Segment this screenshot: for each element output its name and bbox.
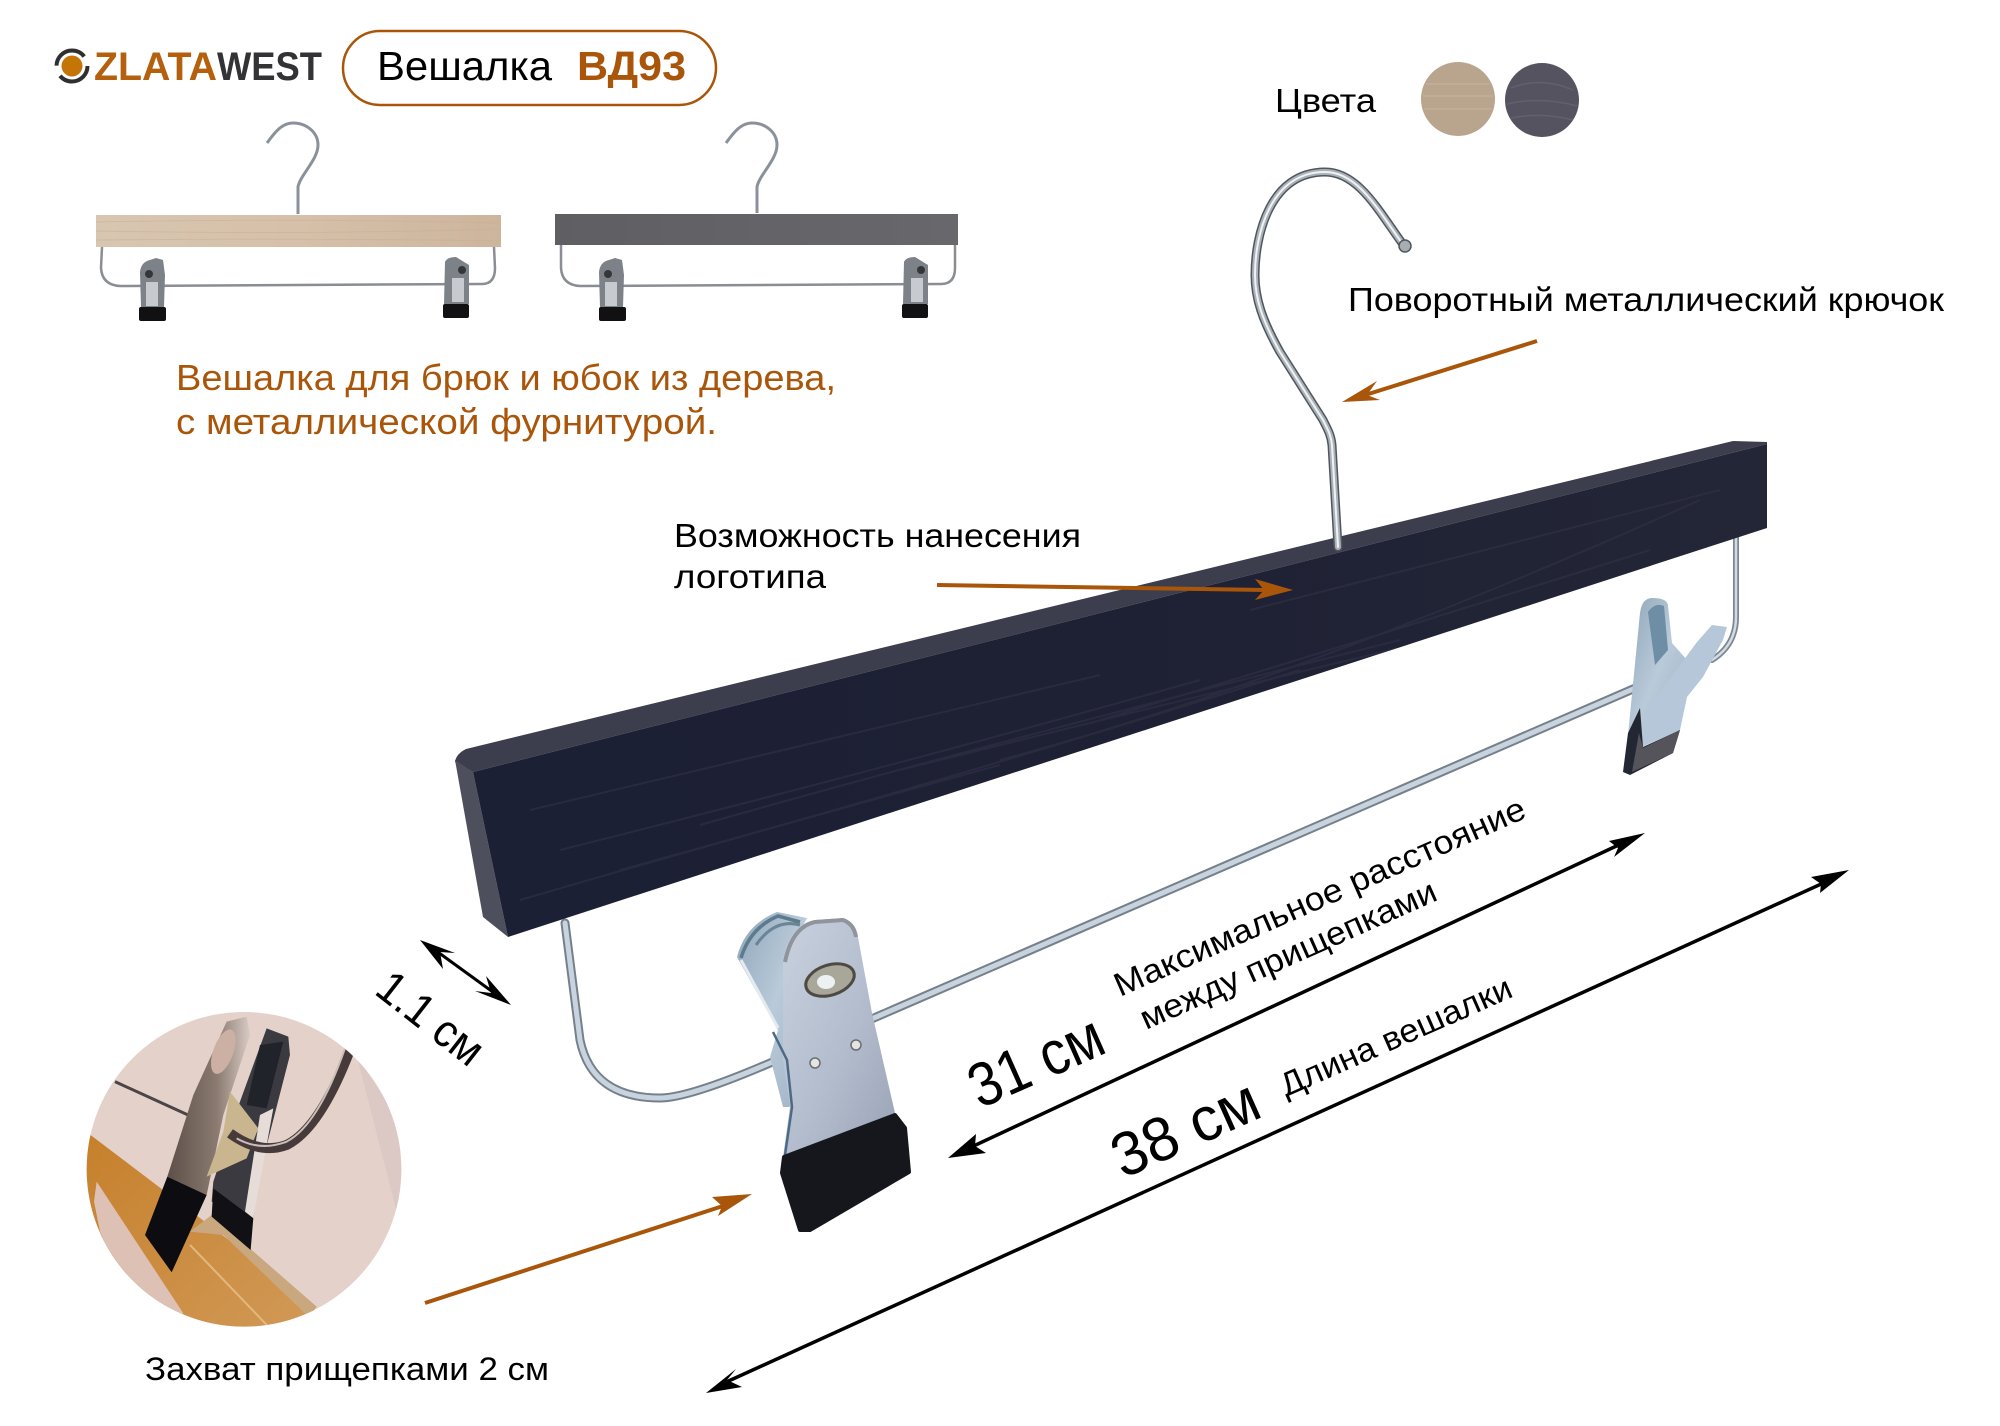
clip detail photo (80, 1005, 410, 1338)
small hanger: grey wood (555, 123, 958, 321)
dimension label: 31 см: 31 см (958, 1001, 1115, 1122)
description text: с металлической фурнитурой. (176, 401, 717, 442)
arrow: hook (1342, 341, 1537, 402)
logo label: логотипа (674, 558, 827, 595)
arrow: clip detail (425, 1194, 752, 1303)
left clip (737, 912, 909, 1230)
dimension label: 1.1 см: 1.1 см (367, 960, 495, 1076)
logo: Zlatawest (56, 45, 322, 89)
logo label (674, 517, 1081, 595)
clip label: Захват прищепками 2 см (145, 1351, 549, 1387)
dimension note: hanger length: Длина вешалки (1274, 969, 1518, 1103)
description text (176, 357, 836, 442)
dimension note: maximum clip distance: Максимальное расстояние (1108, 790, 1531, 1003)
right clip (1623, 598, 1727, 775)
small hanger: light wood (96, 123, 501, 321)
dimension arrow: 38 см (706, 870, 1849, 1393)
dimension note: maximum clip distance: между прищепками (1134, 872, 1442, 1036)
wooden bar (455, 441, 1767, 937)
description text: Вешалка для брюк и юбок из дерева, (176, 357, 836, 398)
colours legend: Цвета (1275, 82, 1377, 119)
logo: Zlatawest: WEST (217, 45, 322, 89)
colours legend (1275, 62, 1579, 137)
dimension: thickness arrow (420, 940, 511, 1005)
arrow: logo area (937, 579, 1293, 600)
title pill: Вешалка ВД93: Вешалка (377, 43, 552, 89)
dimension label: 38 см: 38 см (1101, 1066, 1270, 1192)
title pill: Вешалка ВД93 (343, 31, 716, 105)
logo: Zlatawest: ZLATA (94, 45, 217, 89)
title pill: Вешалка ВД93: ВД93 (577, 43, 686, 89)
logo label: Возможность нанесения (674, 517, 1081, 554)
main hanger photo (455, 172, 1767, 1230)
hook (1255, 172, 1411, 547)
dimension arrow: 31 см (948, 833, 1645, 1158)
hook label: Поворотный металлический крючок (1348, 281, 1945, 318)
lower rod and brackets (565, 530, 1736, 1098)
